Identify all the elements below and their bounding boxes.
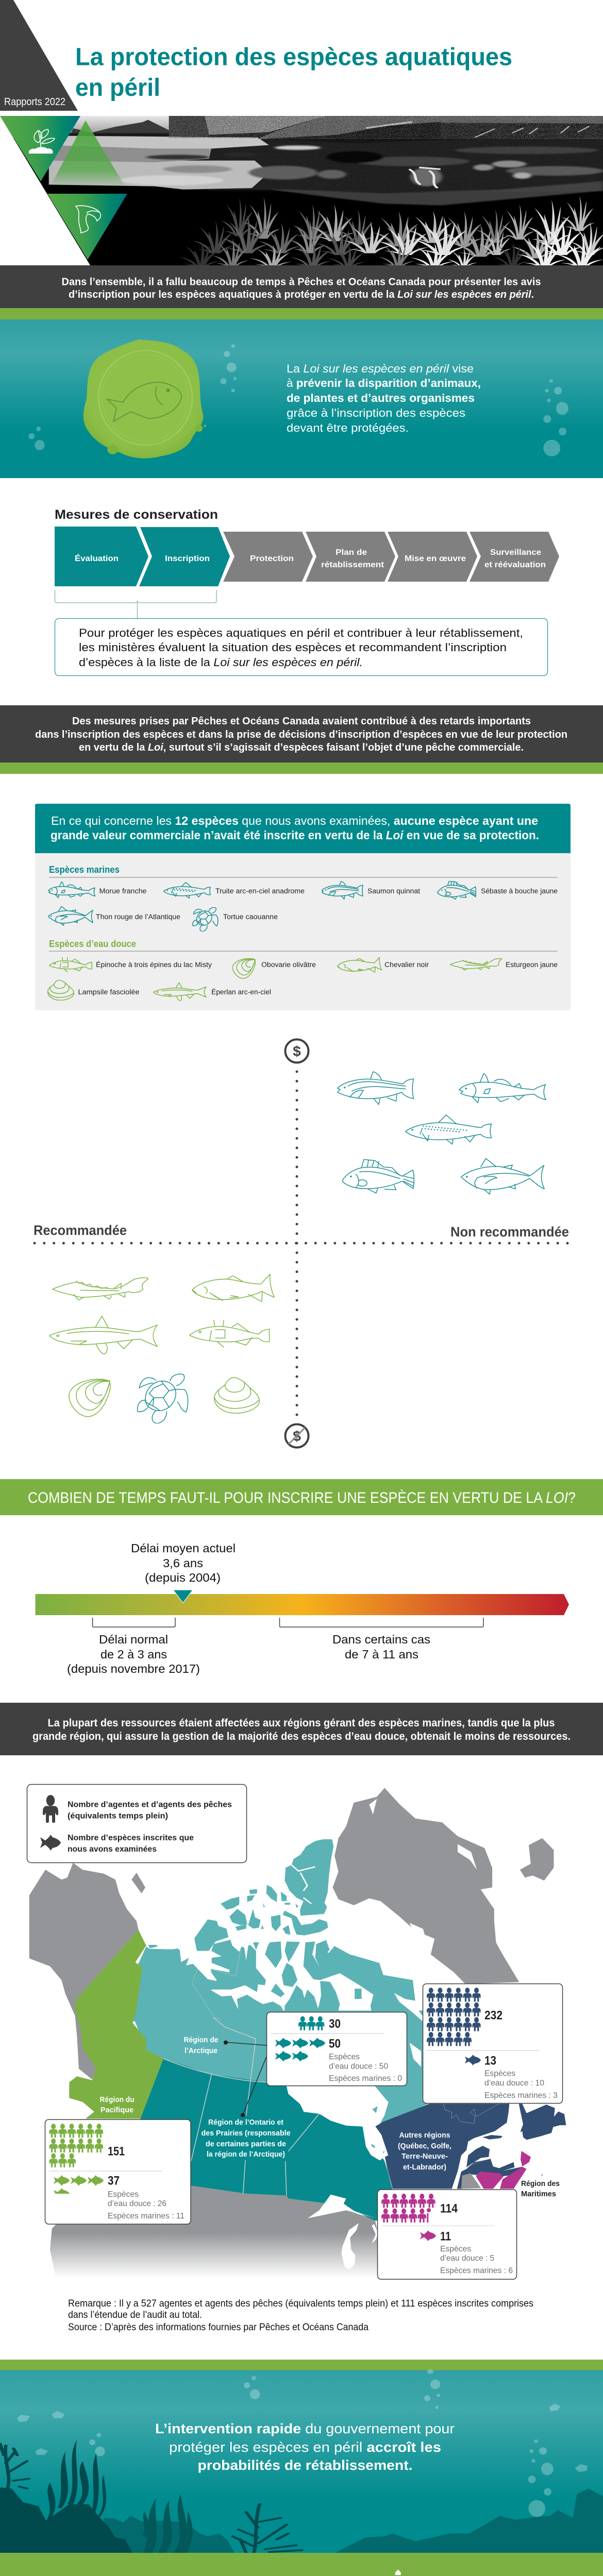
Arctic archipelago bbox=[129, 1839, 423, 2023]
text: act purpose: La Loi sur les espèces en péril vise bbox=[287, 362, 474, 375]
note and source: Source : D’après des informations fournies par Pêches et Océans Canada bbox=[68, 2322, 368, 2333]
label: Ontario and Prairies region: la région de l’Arctique) bbox=[207, 2150, 285, 2159]
process: six chevrons: Évaluation bbox=[75, 553, 119, 563]
text: species statement: En ce qui concerne les 12 espèces que nous avons examinées, aucune espèce ayant une bbox=[51, 814, 538, 827]
United States bbox=[50, 2185, 389, 2279]
list: marine species: Espèces marines bbox=[49, 865, 120, 875]
label: normal delay: Délai normal bbox=[99, 1633, 168, 1646]
Great Lakes bbox=[308, 2195, 377, 2218]
photo: river surface and eelgrass bbox=[0, 116, 603, 267]
callout: Pacific region bbox=[45, 2120, 191, 2224]
band: intro statement: d’inscription pour les espèces aquatiques à protéger en vertu de la Loi sur les espèces en péril. bbox=[69, 289, 534, 300]
callout: Pacific region: 37 bbox=[108, 2174, 120, 2188]
panel: act purpose bbox=[0, 319, 603, 478]
icon: no dollar: $ bbox=[293, 1428, 301, 1444]
triangle: fish bbox=[47, 194, 127, 260]
note and source: dans l’étendue de l’audit au total. bbox=[68, 2310, 202, 2320]
label: Ontario and Prairies region bbox=[201, 2118, 291, 2159]
Arctic region south of the channels bbox=[131, 2011, 429, 2126]
triangle: translucent green bbox=[50, 121, 125, 187]
text: closing message: protéger les espèces en péril accroît les bbox=[169, 2439, 441, 2455]
label: Pacific region: Région du bbox=[100, 2095, 134, 2104]
callout: Pacific region: d’eau douce : 26 bbox=[108, 2199, 166, 2208]
label: Maritimes region: Région des bbox=[521, 2179, 560, 2188]
icon: leaping fish bbox=[76, 206, 100, 233]
label: Pacific region bbox=[100, 2095, 134, 2114]
note and source bbox=[68, 2298, 533, 2333]
callout: Maritimes region: 114 bbox=[440, 2202, 458, 2215]
band: delays statement: dans l’inscription des espèces et dans la prise de décisions d’inscription d’espèces en vue de leur protection bbox=[35, 729, 567, 740]
marker: average bbox=[173, 1590, 193, 1603]
process: six chevrons: Surveillance bbox=[490, 548, 541, 557]
text: act purpose: de plantes et d’autres organismes bbox=[287, 392, 475, 404]
list: marine species: Tortue caouanne bbox=[223, 913, 278, 921]
callout: Arctic region: 50 bbox=[329, 2037, 341, 2050]
list: marine species: Sébaste à bouche jaune bbox=[481, 887, 558, 895]
list: freshwater species: Éperlan arc-en-ciel bbox=[211, 988, 271, 996]
chart: listing time scale bbox=[35, 1541, 569, 1675]
process: six chevrons bbox=[55, 527, 559, 586]
band: delays statement: en vertu de la Loi, surtout s’il s’agissait d’espèces faisant l’objet d’une pêche commerciale. bbox=[79, 742, 524, 753]
legend: (équivalents temps plein) bbox=[68, 1811, 168, 1821]
callout: other regions: d’eau douce : 10 bbox=[484, 2079, 544, 2088]
label: Ontario and Prairies region: de certaines parties de bbox=[206, 2140, 286, 2148]
label: not recommended: Non recommandée bbox=[450, 1224, 569, 1240]
banner: report corner tag: Rapports 2022 bbox=[4, 96, 65, 108]
list: freshwater species: Épinoche à trois épines du lac Misty bbox=[96, 961, 212, 969]
list: marine species bbox=[48, 865, 558, 931]
note and source: Remarque : Il y a 527 agentes et agents des pêches (équivalents temps plein) et 111 espèces inscrites comprises bbox=[68, 2298, 533, 2309]
callout: Pacific region: Espèces bbox=[108, 2190, 139, 2199]
Lake Michigan and Huron bbox=[341, 2223, 378, 2269]
Pacific region bbox=[69, 1930, 163, 2119]
list: freshwater species: Esturgeon jaune bbox=[506, 961, 558, 969]
bubbles bbox=[28, 344, 568, 456]
bracket: certain cases bbox=[279, 1618, 483, 1627]
label: other regions bbox=[398, 2131, 451, 2172]
label: current average: Délai moyen actuel bbox=[131, 1541, 236, 1555]
Province borders bbox=[163, 2018, 319, 2196]
label: Ontario and Prairies region: Région de l’Ontario et bbox=[208, 2118, 283, 2127]
panel: twelve species bbox=[35, 804, 571, 1010]
label: normal delay: (depuis novembre 2017) bbox=[67, 1662, 200, 1675]
band: delays statement bbox=[0, 705, 603, 774]
label: certain cases: Dans certains cas bbox=[332, 1633, 430, 1646]
list: freshwater species bbox=[47, 939, 558, 1001]
callout: Arctic region bbox=[267, 2012, 407, 2086]
text: closing message: L’intervention rapide du gouvernement pour bbox=[155, 2421, 455, 2436]
Hudson Bay bbox=[287, 2086, 389, 2127]
callout: Pacific region: 151 bbox=[108, 2144, 125, 2159]
footer bbox=[0, 2553, 603, 2576]
Greenland bbox=[332, 1788, 519, 1984]
band: resources statement bbox=[0, 1703, 603, 1755]
icon: green wax seal with fish bbox=[83, 340, 206, 459]
label: recommended: Recommandée bbox=[34, 1223, 127, 1238]
callout: Pacific region: Espèces marines : 11 bbox=[108, 2212, 185, 2221]
leader lines bbox=[224, 2041, 266, 2117]
list: marine species: Saumon quinnat bbox=[367, 887, 420, 895]
label: normal delay bbox=[67, 1633, 200, 1675]
Eastern regions bbox=[362, 2104, 566, 2189]
text: act purpose: devant être protégées. bbox=[287, 421, 409, 434]
icon: dollar: $ bbox=[293, 1043, 301, 1059]
legend bbox=[27, 1785, 246, 1863]
species: recommended bbox=[49, 1274, 274, 1423]
bar: green to red gradient bbox=[35, 1594, 569, 1615]
process: six chevrons: rétablissement bbox=[321, 561, 384, 569]
callout: Maritimes region: Espèces marines : 6 bbox=[440, 2266, 513, 2275]
label: Maritimes region bbox=[521, 2179, 560, 2198]
process: six chevrons: et réévaluation bbox=[484, 561, 546, 569]
band: resources statement: grande région, qui assure la gestion de la majorité des espèces d’eau douce, obtenait le moins de ressources. bbox=[32, 1731, 571, 1742]
banner: report corner tag bbox=[0, 0, 78, 111]
text: species statement bbox=[51, 814, 539, 842]
Other regions bbox=[375, 2104, 509, 2189]
list: freshwater species: Chevalier noir bbox=[384, 961, 429, 969]
icon: arms of Canada bbox=[384, 2570, 411, 2576]
text: species statement: grande valeur commerciale n’avait été inscrite en vertu de la Loi en vue de sa protection. bbox=[51, 828, 539, 842]
callout: assessment text: Pour protéger les espèces aquatiques en péril et contribuer à leur rétablissement, bbox=[79, 626, 523, 639]
label: normal delay: de 2 à 3 ans bbox=[100, 1648, 167, 1661]
label: current average: (depuis 2004) bbox=[145, 1571, 221, 1584]
band: delays statement: Des mesures prises par Pêches et Océans Canada avaient contribué à des retards importants bbox=[72, 716, 531, 727]
label: Pacific region: Pacifique bbox=[100, 2106, 133, 2114]
text: act purpose bbox=[287, 362, 481, 434]
icon: sprout bbox=[29, 129, 55, 153]
icon: dollar bbox=[286, 1040, 308, 1062]
species: not recommended bbox=[338, 1072, 546, 1194]
callout: assessment text: d’espèces à la liste de la Loi sur les espèces en péril. bbox=[79, 656, 363, 669]
callout: Arctic region: d’eau douce : 50 bbox=[329, 2062, 388, 2071]
callout: other regions: Espèces bbox=[484, 2069, 515, 2078]
callout: Maritimes region: Espèces bbox=[440, 2245, 471, 2253]
label: Arctic region bbox=[183, 2036, 219, 2055]
callout: Maritimes region: d’eau douce : 5 bbox=[440, 2254, 494, 2263]
icon: no dollar bbox=[286, 1424, 308, 1448]
callout: Arctic region: 30 bbox=[329, 2017, 341, 2031]
triangle: plant bbox=[0, 116, 80, 181]
label: certain cases bbox=[332, 1633, 430, 1661]
seabed illustration bbox=[0, 2369, 603, 2553]
callout: Arctic region: Espèces bbox=[329, 2053, 360, 2061]
label: other regions: et-Labrador) bbox=[403, 2163, 446, 2172]
list: marine species: Morue franche bbox=[99, 887, 146, 895]
heading: conservation measures: Mesures de conservation bbox=[55, 507, 218, 522]
process: six chevrons: Protection bbox=[250, 554, 294, 563]
label: Maritimes region: Maritimes bbox=[521, 2190, 556, 2198]
process: six chevrons: Mise en œuvre bbox=[405, 554, 466, 563]
process: six chevrons: Inscription bbox=[165, 554, 210, 563]
text: act purpose: grâce à l’inscription des espèces bbox=[287, 406, 465, 419]
Ontario and Prairies region bbox=[140, 2059, 392, 2221]
legend: Nombre d’espèces inscrites que bbox=[68, 1834, 194, 1842]
bracket: normal bbox=[93, 1618, 175, 1627]
label: Ontario and Prairies region: des Prairies (responsable bbox=[201, 2129, 291, 2138]
label: current average: 3,6 ans bbox=[163, 1556, 203, 1570]
band: green strip bbox=[0, 2360, 603, 2370]
label: Arctic region: Région de bbox=[183, 2036, 219, 2044]
callout: assessment text bbox=[55, 618, 547, 676]
label: Arctic region: l’Arctique bbox=[185, 2046, 217, 2055]
list: freshwater species: Lampsile fasciolée bbox=[78, 988, 139, 996]
list: freshwater species: Espèces d’eau douce bbox=[49, 939, 136, 949]
callout: other regions: 232 bbox=[484, 2008, 502, 2023]
label: other regions: Terre-Neuve- bbox=[401, 2152, 448, 2161]
title: La protection des espèces aquatiques bbox=[75, 43, 512, 71]
callout: other regions: 13 bbox=[484, 2054, 496, 2068]
callout: other regions bbox=[423, 1984, 563, 2103]
map: Canada regions bbox=[29, 1788, 566, 2279]
callout: Arctic region: Espèces marines : 0 bbox=[329, 2074, 402, 2083]
process: six chevrons: Plan de bbox=[336, 548, 367, 557]
title bbox=[75, 43, 512, 101]
panel: closing message bbox=[0, 2369, 603, 2553]
legend: Nombre d’agentes et d’agents des pêches bbox=[68, 1800, 232, 1809]
band: resources statement: La plupart des ressources étaient affectées aux régions gérant des espèces marines, tandis que la plus bbox=[47, 1717, 555, 1729]
callout: Maritimes region: 11 bbox=[440, 2230, 451, 2243]
callout: assessment text: les ministères évaluent la situation des espèces et recommandent l’inscription bbox=[79, 641, 507, 654]
Iceland bbox=[520, 1838, 554, 1880]
text: closing message: probabilités de rétablissement. bbox=[198, 2458, 412, 2473]
Alaska bbox=[29, 1863, 139, 2080]
list: marine species: Truite arc-en-ciel anadrome bbox=[215, 887, 305, 895]
band: intro statement bbox=[0, 265, 603, 319]
label: other regions: Autres régions bbox=[399, 2131, 450, 2140]
text: closing message bbox=[155, 2421, 455, 2473]
chart: commercial value quadrant bbox=[34, 1040, 569, 1448]
band: intro statement: Dans l’ensemble, il a fallu beaucoup de temps à Pêches et Océans Canada pour présenter les avis bbox=[62, 276, 541, 287]
band: timeline heading: COMBIEN DE TEMPS FAUT-IL POUR INSCRIRE UNE ESPÈCE EN VERTU DE LA LOI? bbox=[28, 1489, 576, 1506]
label: current average bbox=[131, 1541, 236, 1584]
title: en péril bbox=[75, 74, 160, 101]
list: marine species: Thon rouge de l’Atlantique bbox=[96, 913, 180, 921]
band: timeline heading bbox=[0, 1479, 603, 1515]
label: certain cases: de 7 à 11 ans bbox=[345, 1648, 418, 1661]
callout: Maritimes region bbox=[377, 2190, 516, 2279]
legend: nous avons examinées bbox=[68, 1845, 157, 1854]
bracket: assessment and listing bbox=[55, 590, 216, 618]
list: freshwater species: Obovarie olivâtre bbox=[261, 961, 316, 969]
Maritimes region bbox=[476, 2172, 504, 2189]
callout: other regions: Espèces marines : 3 bbox=[484, 2091, 558, 2100]
text: act purpose: à prévenir la disparition d’animaux, bbox=[287, 377, 481, 389]
label: other regions: (Québec, Golfe, bbox=[398, 2142, 451, 2150]
